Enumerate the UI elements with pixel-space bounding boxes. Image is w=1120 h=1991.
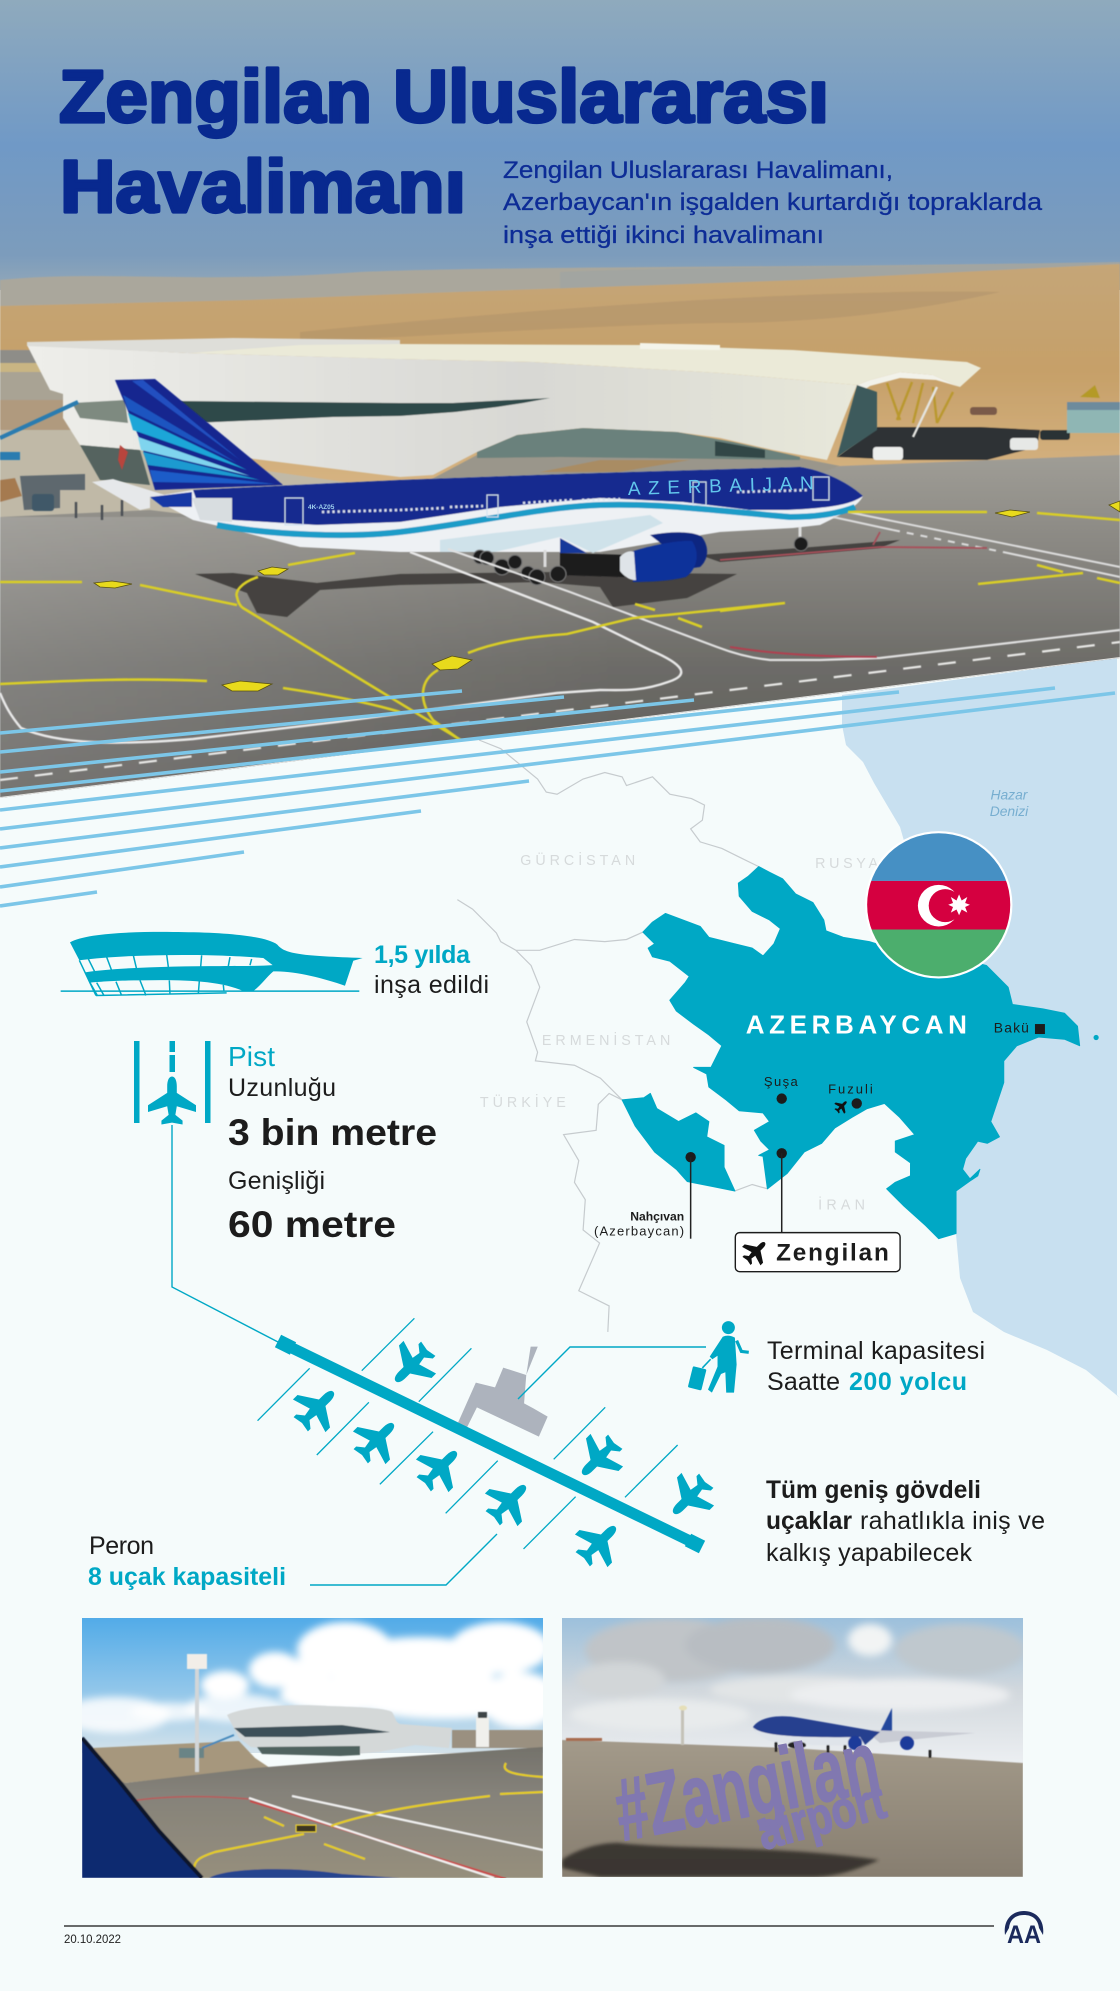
apron markings [0, 512, 1120, 780]
city: Fuzuli with airport: Fuzuli [828, 1081, 873, 1096]
hero photo: airport terminal and aircraft [0, 0, 1120, 810]
subtitle: Zengilan Uluslararası Havalimanı, [503, 157, 893, 184]
text: construction time [374, 941, 489, 999]
text: terminal capacity: Saatte [767, 1368, 840, 1396]
terminal connector [518, 1347, 706, 1399]
markings [132, 1763, 543, 1879]
aircraft livery text: AZERBAIJAN [627, 473, 814, 500]
text: apron capacity: Peron [89, 1532, 154, 1560]
text: construction time: inşa edildi [374, 971, 489, 999]
callout: Nahçıvan [594, 1152, 696, 1239]
windows and doors [322, 490, 808, 512]
neighbour labels [480, 851, 878, 1214]
sea: Hazar Denizi [842, 658, 1120, 1398]
wing [440, 515, 663, 553]
text: runway details: 3 bin metre [228, 1112, 437, 1153]
hills and desert [0, 262, 1120, 810]
footer rule [64, 1925, 994, 1927]
sign text [616, 1740, 889, 1850]
title [59, 55, 829, 228]
text: terminal capacity: Terminal kapasitesi [767, 1337, 985, 1365]
terminal building [27, 338, 981, 485]
neighbour labels: TÜRKİYE [480, 1093, 566, 1111]
tarmac [82, 1747, 543, 1878]
logo: AA: AA [1007, 1921, 1041, 1949]
taxi signs [94, 501, 1120, 691]
diagonal runway stripes [0, 688, 1115, 906]
text: runway details: 60 metre [228, 1204, 396, 1245]
date: 20.10.2022 [64, 1934, 121, 1946]
text: runway details: Pist [228, 1041, 275, 1072]
subtitle: inşa ettiği ikinci havalimanı [503, 222, 824, 249]
Azerbaijan mainland [643, 867, 1080, 1239]
callout: Nahçıvan: Nahçıvan [630, 1209, 684, 1223]
text: runway details: Uzunluğu [228, 1074, 336, 1102]
text: apron capacity [88, 1532, 286, 1591]
callout: Nahçıvan: (Azerbaycan) [594, 1224, 684, 1239]
aircraft registration: 4K-AZ05 [308, 504, 335, 511]
map of Azerbaijan and neighbours [457, 740, 1099, 1332]
sign text: #Zangilan [607, 1712, 887, 1860]
landing gear [473, 527, 808, 585]
peron connector [310, 1534, 497, 1585]
shadow of the sign [562, 1843, 879, 1877]
clouds [570, 1617, 1025, 1731]
callout: Zengilan: Zengilan [776, 1239, 889, 1266]
city: Şuşa [764, 1074, 799, 1104]
icon: passenger with suitcase [688, 1321, 749, 1393]
text: construction time: 1,5 yılda [374, 941, 471, 969]
sea label: Hazar [990, 786, 1029, 802]
city: Şuşa: Şuşa [764, 1074, 799, 1089]
neighbour labels: RUSYA [815, 856, 878, 872]
entrance glass [837, 385, 877, 457]
icon: terminal silhouette [61, 932, 363, 996]
icon: runway with plane [134, 1041, 210, 1124]
right car park and small building [837, 427, 1040, 460]
stabiliser [92, 479, 165, 510]
text: wide-body aircraft [766, 1476, 1045, 1567]
text: wide-body aircraft: kalkış yapabilecek [766, 1539, 972, 1567]
Nahçıvan exclave [622, 1093, 735, 1191]
flag of Azerbaijan [865, 831, 1012, 979]
terminal plan [458, 1347, 548, 1437]
ground behind the aircraft [430, 455, 840, 480]
boom lift and people [0, 402, 128, 520]
runway strip [278, 1341, 702, 1547]
sea label [990, 786, 1029, 819]
neighbour labels: GÜRCİSTAN [520, 851, 635, 869]
text: runway details [228, 1041, 437, 1245]
clouds [60, 1622, 560, 1733]
parked planes [284, 1332, 723, 1576]
subtitle [503, 157, 1043, 249]
connector from runway icon [172, 1125, 278, 1342]
aircraft [92, 379, 863, 585]
tail fin [115, 379, 283, 490]
sea label: Denizi [990, 803, 1029, 819]
upper window band [180, 398, 550, 423]
aircraft [753, 1708, 975, 1758]
title: Havalimanı [60, 145, 466, 228]
country name: AZERBAYCAN [746, 1010, 967, 1040]
city: Fuzuli with airport [828, 1081, 873, 1116]
logo: AA [1005, 1911, 1043, 1949]
city: Bakü: Bakü [994, 1020, 1029, 1036]
text: terminal capacity [767, 1337, 985, 1396]
lower curved glass [477, 428, 800, 460]
city: Bakü [994, 1020, 1045, 1036]
fuselage [150, 467, 863, 552]
aircraft window frame and wing [82, 1738, 202, 1878]
neighbour labels: İRAN [818, 1196, 865, 1214]
text: wide-body aircraft: Tüm geniş gövdeli [766, 1476, 981, 1504]
text: apron capacity: 8 uçak kapasiteli [88, 1563, 286, 1591]
neighbour labels: ERMENİSTAN [542, 1031, 670, 1049]
yellow canopy struts [887, 382, 953, 423]
ground [562, 1740, 1023, 1877]
subtitle: Azerbaycan'ın işgalden kurtardığı topraklarda [503, 189, 1043, 216]
text: runway details: Genişliği [228, 1167, 325, 1195]
text: wide-body aircraft: rahatlıkla iniş ve [860, 1507, 1045, 1535]
text: terminal capacity: 200 yolcu [849, 1368, 967, 1396]
terminal [227, 1705, 452, 1756]
photo: terminal seen from aircraft window [60, 1618, 560, 1879]
text: wide-body aircraft: uçaklar [766, 1507, 852, 1535]
underbody [560, 553, 630, 577]
title: Zengilan Uluslararası [59, 55, 829, 138]
engine [620, 532, 707, 582]
country borders [457, 740, 767, 1332]
dirt ground [92, 1741, 270, 1783]
airport diagram: runway, terminal, apron with planes [172, 1125, 723, 1585]
plane shadow [195, 540, 900, 617]
callout: Zengilan [735, 1148, 900, 1272]
apron stand lines [258, 1318, 678, 1549]
photo: aircraft and #Zangilan airport sign [562, 1617, 1025, 1877]
sign text: airport [751, 1772, 892, 1862]
